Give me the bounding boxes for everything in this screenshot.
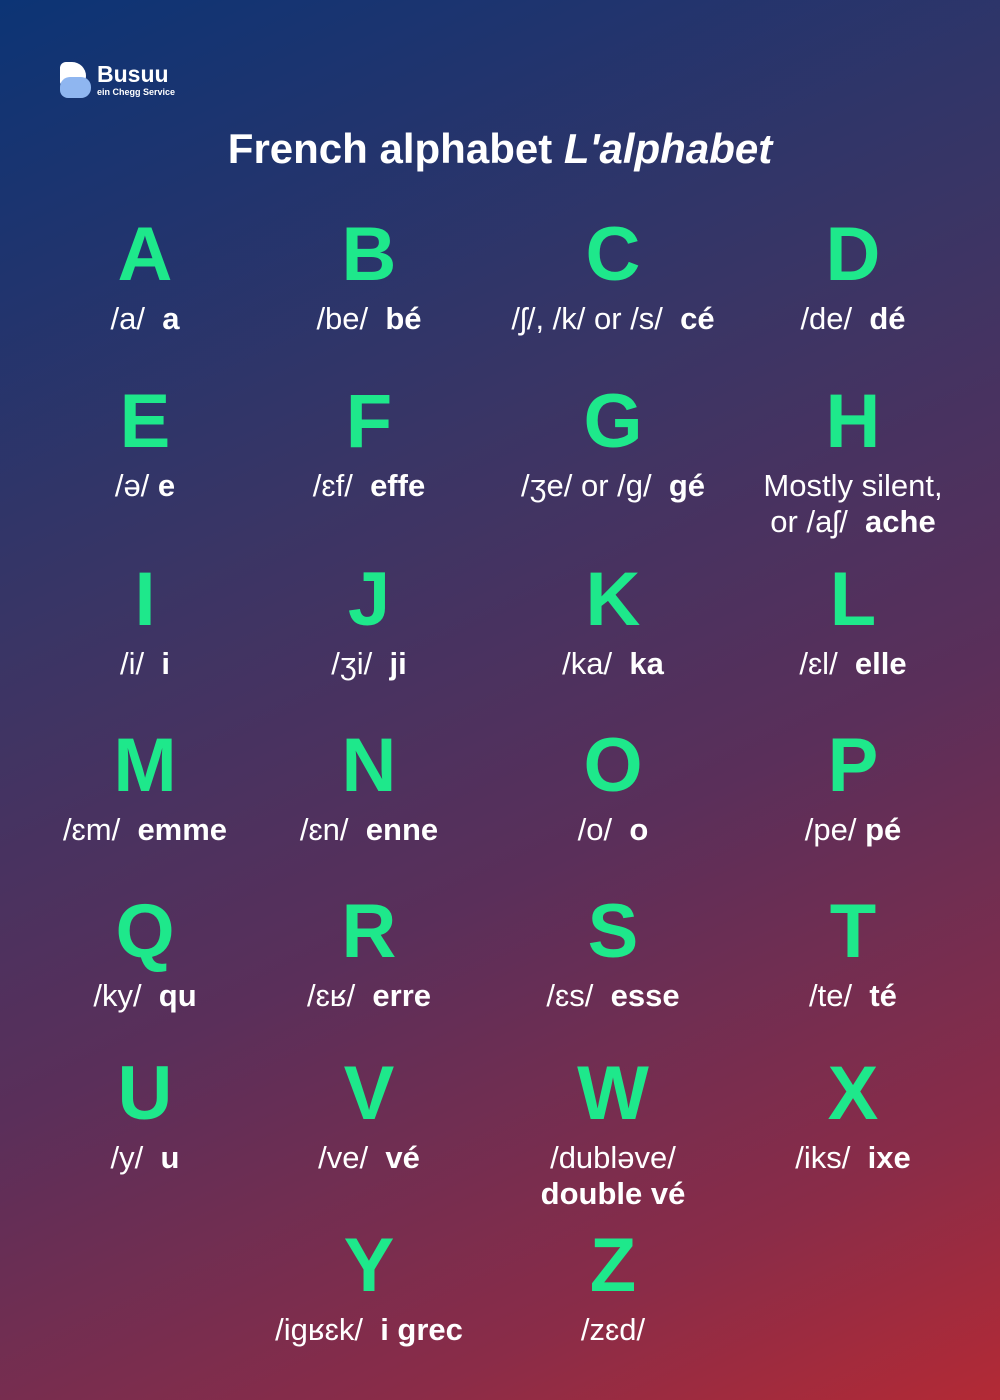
S: /ɛs/ esse — [546, 978, 680, 1013]
R — [307, 889, 431, 1013]
B — [316, 212, 422, 336]
X: /iks/ ixe — [795, 1140, 911, 1175]
A: A — [118, 212, 172, 297]
F — [312, 379, 425, 503]
D: /de/ dé — [800, 301, 906, 336]
J: J — [348, 557, 390, 642]
brand text: ein Chegg Service — [97, 87, 175, 97]
I: I — [134, 557, 156, 642]
Z — [580, 1223, 646, 1347]
Z: Z — [590, 1223, 636, 1308]
A: /a/ a — [111, 301, 179, 336]
W: W — [577, 1051, 649, 1136]
H: H — [826, 379, 880, 464]
H: or /aʃ/ ache — [770, 504, 936, 539]
W: /dubləve/ — [550, 1140, 676, 1175]
Q: /ky/ qu — [93, 978, 197, 1013]
S — [546, 889, 680, 1013]
title: French alphabet L'alphabet — [228, 125, 772, 172]
S: S — [588, 889, 638, 974]
Y: Y — [344, 1223, 394, 1308]
G: G — [583, 379, 643, 464]
H — [763, 379, 943, 539]
icon: busuu — [60, 62, 91, 98]
V: V — [344, 1051, 394, 1136]
X — [795, 1051, 911, 1175]
E: E — [120, 379, 170, 464]
Y — [275, 1223, 463, 1347]
Q — [93, 889, 197, 1013]
logo — [60, 61, 175, 98]
L: /ɛl/ elle — [799, 646, 907, 681]
K — [562, 557, 664, 681]
E — [114, 379, 175, 503]
W — [541, 1051, 685, 1211]
W: double vé — [541, 1176, 685, 1211]
M — [63, 723, 227, 847]
I — [120, 557, 170, 681]
C: /ʃ/, /k/ or /s/ cé — [511, 301, 715, 336]
A — [110, 212, 180, 336]
V: /ve/ vé — [318, 1140, 420, 1175]
H: Mostly silent, — [763, 468, 943, 503]
R: /ɛʁ/ erre — [307, 978, 431, 1013]
F: F — [346, 379, 392, 464]
L — [799, 557, 907, 681]
brand text: Busuu — [97, 61, 169, 87]
B: /be/ bé — [316, 301, 422, 336]
N — [300, 723, 438, 847]
M: /ɛm/ emme — [63, 812, 227, 847]
U: U — [118, 1051, 172, 1136]
Y: /igʁɛk/ i grec — [275, 1312, 463, 1347]
T: /te/ té — [809, 978, 897, 1013]
I: /i/ i — [120, 646, 170, 681]
G — [521, 379, 705, 503]
G: /ʒe/ or /g/ gé — [521, 468, 705, 503]
C: C — [586, 212, 640, 297]
T — [809, 889, 897, 1013]
E: /ə/ e — [115, 468, 175, 503]
M: M — [113, 723, 177, 808]
K: K — [586, 557, 640, 642]
B: B — [342, 212, 396, 297]
N: /ɛn/ enne — [300, 812, 438, 847]
T: T — [830, 889, 876, 974]
C — [511, 212, 715, 336]
O — [578, 723, 648, 847]
U — [110, 1051, 179, 1175]
R: R — [342, 889, 396, 974]
N: N — [342, 723, 396, 808]
Q: Q — [115, 889, 175, 974]
X: X — [828, 1051, 878, 1136]
O: /o/ o — [578, 812, 648, 847]
P: /pe/ pé — [805, 812, 901, 847]
U: /y/ u — [111, 1140, 179, 1175]
Z: /zɛd/ — [581, 1312, 645, 1347]
D: D — [826, 212, 880, 297]
D — [800, 212, 906, 336]
brand text — [97, 61, 175, 97]
F: /ɛf/ effe — [313, 468, 425, 503]
P: P — [828, 723, 878, 808]
L: L — [830, 557, 876, 642]
K: /ka/ ka — [562, 646, 664, 681]
P — [804, 723, 901, 847]
O: O — [583, 723, 643, 808]
J — [331, 557, 407, 681]
J: /ʒi/ ji — [331, 646, 407, 681]
V — [318, 1051, 420, 1175]
